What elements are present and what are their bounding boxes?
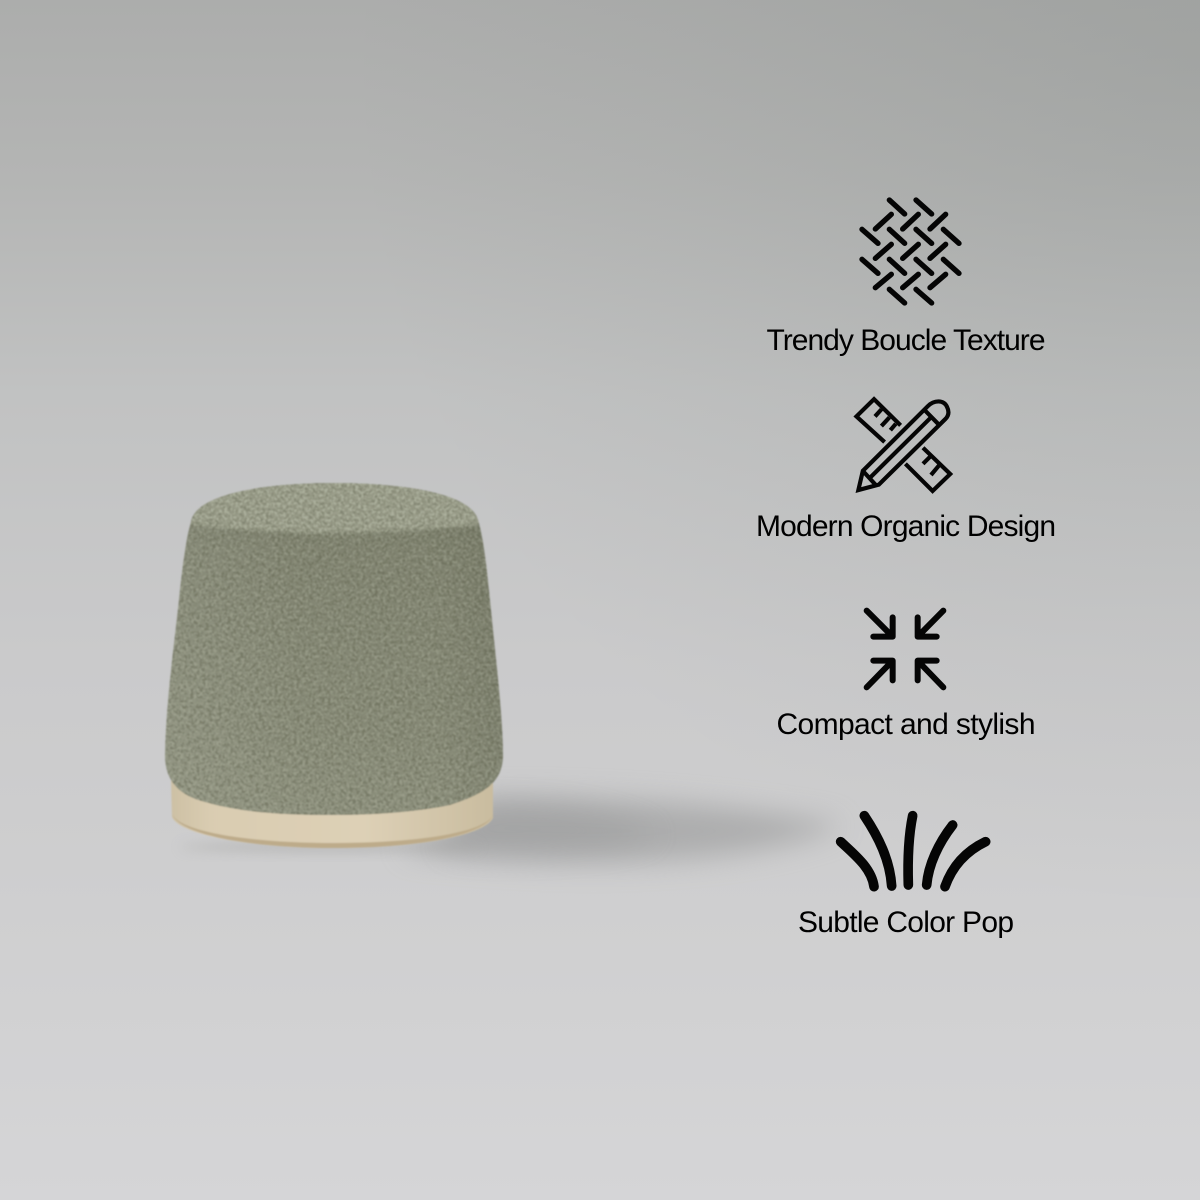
feature: compact and stylish xyxy=(776,611,1036,741)
icon: woven texture xyxy=(862,200,959,303)
feature: subtle color pop xyxy=(798,816,1014,939)
feature: trendy boucle texture xyxy=(766,200,1046,357)
feature: modern organic design xyxy=(756,399,1056,543)
label: Compact and stylish xyxy=(776,708,1036,741)
upholstered top xyxy=(190,482,479,534)
label: Trendy Boucle Texture xyxy=(766,324,1046,357)
label: Modern Organic Design xyxy=(756,510,1056,543)
icon: burst strokes xyxy=(841,816,986,887)
upholstered body xyxy=(160,478,510,820)
label: Subtle Color Pop xyxy=(798,906,1014,939)
icon: compress arrows xyxy=(867,611,943,687)
cast shadow xyxy=(180,797,845,862)
icon: ruler and pencil xyxy=(856,399,950,491)
wooden base xyxy=(171,780,493,848)
stool xyxy=(160,478,510,848)
